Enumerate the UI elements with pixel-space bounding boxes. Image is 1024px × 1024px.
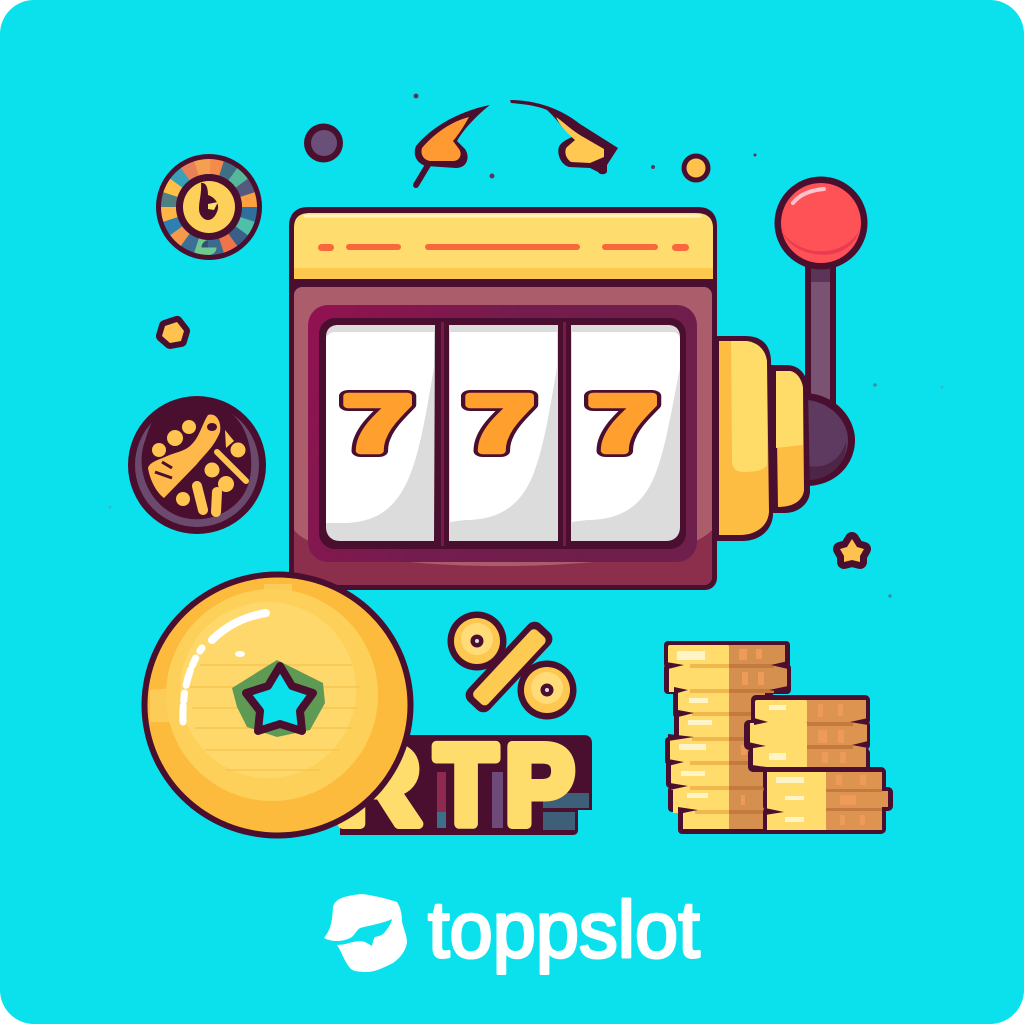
large yellow cylinder <box>715 336 773 541</box>
machine body <box>289 275 717 590</box>
icon: purple ball <box>304 124 343 162</box>
RTP lettering <box>335 722 592 849</box>
icon: percent <box>448 612 576 720</box>
reel 3 <box>571 325 680 541</box>
icon: roulette chip <box>156 154 262 260</box>
machine top panel <box>289 207 717 287</box>
big gold coin <box>142 572 414 838</box>
small star <box>840 539 864 562</box>
coin star <box>232 660 325 737</box>
right coin stack <box>744 695 893 834</box>
icon: left arc arrow <box>415 105 490 185</box>
reel 3: 7 <box>588 379 657 469</box>
icon: food plate <box>128 396 266 534</box>
RTP lettering: P <box>505 723 574 849</box>
small yellow cylinder <box>768 365 810 513</box>
reel window <box>319 318 686 549</box>
RTP lettering: R <box>335 722 421 848</box>
icon: coin stacks <box>664 641 893 834</box>
lever knob <box>774 176 868 270</box>
reel 1: 7 <box>343 379 412 469</box>
reel 2: 7 <box>465 379 534 469</box>
logo mark <box>324 894 407 972</box>
lever shaft <box>805 260 836 410</box>
slot machine <box>289 207 717 590</box>
brand name: toppslot <box>428 885 700 974</box>
icon: small yellow hexagon <box>162 322 184 343</box>
reel 2: 7 <box>465 379 534 469</box>
reel 2 <box>449 325 558 541</box>
icon: small dots <box>108 94 944 598</box>
reel separators <box>441 322 566 546</box>
reel 1 <box>326 325 435 541</box>
reel 3: 7 <box>588 379 657 469</box>
left coin stack <box>664 641 791 834</box>
reel 1: 7 <box>343 379 412 469</box>
icon: yellow dot <box>682 154 710 182</box>
icon: right arc arrow <box>510 100 618 174</box>
reel window frame <box>308 305 697 562</box>
icon: lever <box>774 176 868 486</box>
lever base <box>806 393 855 486</box>
RTP lettering: T <box>435 722 497 848</box>
